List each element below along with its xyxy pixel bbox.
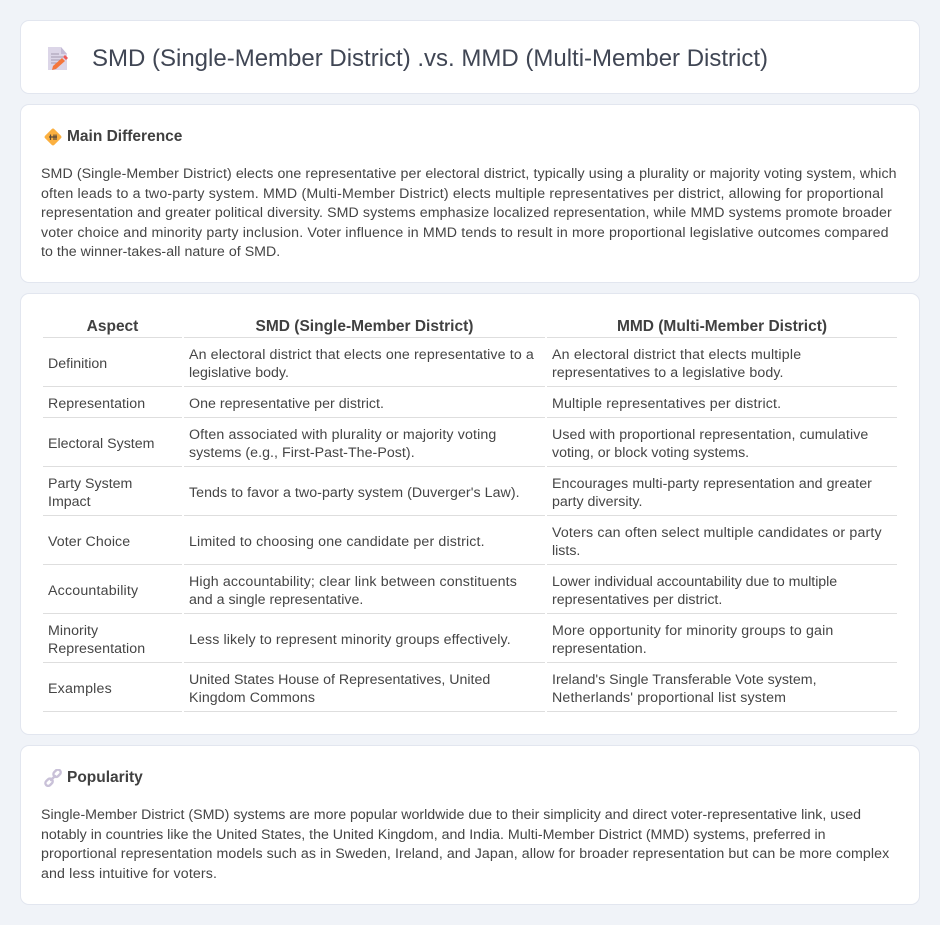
row: representation: One representative per district. [189, 396, 384, 412]
row: accountability [43, 574, 897, 614]
text block: popularity: proportional representation models such as in Sweden, Ireland, and Japan, allow for broader representation but can be more complex [41, 846, 889, 862]
row: electoral system: systems (e.g., First-Past-The-Post). [189, 445, 415, 461]
row: electoral system: Used with proportional representation, cumulative [552, 427, 868, 443]
panel: comparison table [20, 293, 920, 735]
table header: Aspect [87, 318, 138, 335]
row: definition: Definition [48, 356, 107, 372]
row: definition: representatives to a legislative body. [552, 365, 783, 381]
row: party system impact: Party System [48, 476, 132, 492]
table header: SMD (Single-Member District) [256, 318, 473, 335]
panel: popularity [20, 745, 920, 905]
row: voter choice: Limited to choosing one candidate per district. [189, 534, 485, 550]
icon: document with pencil [48, 47, 68, 70]
row: minority representation: More opportunity for minority groups to gain [552, 623, 833, 639]
row: voter choice [43, 525, 897, 565]
row: definition: legislative body. [189, 365, 289, 381]
row: definition: An electoral district that elects multiple [552, 347, 801, 363]
row: minority representation: Representation [48, 641, 145, 657]
text block: popularity: notably in countries like the United States, the United Kingdom, and India. Multi-Member District (MMD) systems, preferred in [41, 826, 826, 842]
panel: main difference [20, 104, 920, 283]
row: minority representation: representation. [552, 641, 647, 657]
row: examples [43, 672, 897, 712]
row: voter choice: lists. [552, 543, 580, 559]
text block: main difference [41, 166, 897, 260]
text block: popularity [41, 807, 889, 882]
row: examples: Kingdom Commons [189, 690, 315, 706]
table header [43, 318, 897, 338]
row: party system impact [43, 476, 897, 516]
row: accountability: representatives per district. [552, 592, 722, 608]
text block: popularity: Single-Member District (SMD) systems are more popular worldwide due to their simplicity and direct voter-representative link, used [41, 807, 861, 823]
heading: main difference: Main Difference [67, 128, 182, 145]
row: accountability: Lower individual accountability due to multiple [552, 574, 837, 590]
row: party system impact: Impact [48, 494, 91, 510]
row: party system impact: Encourages multi-party representation and greater [552, 476, 872, 492]
row: examples: Netherlands' proportional list system [552, 690, 786, 706]
row: examples: Examples [48, 681, 112, 697]
row: definition [43, 347, 897, 387]
text block: main difference: SMD (Single-Member District) elects one representative per electoral district, typically using a plurality or majority voting system, which [41, 166, 897, 182]
row: accountability: Accountability [48, 583, 138, 599]
row: voter choice: Voter Choice [48, 534, 130, 550]
row: electoral system: Electoral System [48, 436, 154, 452]
heading: popularity: Popularity [67, 769, 143, 786]
row: electoral system: voting, or block voting systems. [552, 445, 749, 461]
panel: title card [20, 20, 920, 94]
row: accountability: and a single representative. [189, 592, 363, 608]
row: electoral system [43, 427, 897, 467]
text block: main difference: voter choice and minority party inclusion. Voter influence in MMD tends to result in more proportional legislative outcomes compared [41, 224, 889, 240]
row: representation: Representation [48, 396, 145, 412]
text block: popularity: and less intuitive for voters. [41, 866, 217, 882]
row: party system impact: Tends to favor a two-party system (Duverger's Law). [189, 485, 520, 501]
table header: MMD (Multi-Member District) [617, 318, 827, 335]
row: minority representation: Less likely to represent minority groups effectively. [189, 632, 511, 648]
title: SMD (Single-Member District) .vs. MMD (Multi-Member District) [92, 45, 768, 72]
row: voter choice: Voters can often select multiple candidates or party [552, 525, 882, 541]
row: accountability: High accountability; clear link between constituents [189, 574, 517, 590]
row: party system impact: party diversity. [552, 494, 642, 510]
row: minority representation: Minority [48, 623, 98, 639]
row: minority representation [43, 623, 897, 663]
text block: main difference: often leads to a two-party system. MMD (Multi-Member District) elects multiple representatives per district, allowing for proportional [41, 186, 884, 202]
row: examples: United States House of Representatives, United [189, 672, 490, 688]
text block: main difference: to the winner-takes-all nature of SMD. [41, 244, 280, 260]
row: definition: An electoral district that elects one representative to a [189, 347, 534, 363]
icon: chain link [44, 769, 62, 787]
row: examples: Ireland's Single Transferable Vote system, [552, 672, 817, 688]
icon: orange diamond sign [44, 128, 62, 146]
text block: main difference: representation and greater political diversity. SMD systems emphasize localized representation, while MMD systems promote broader [41, 205, 892, 221]
row: representation [43, 396, 897, 418]
row: representation: Multiple representatives per district. [552, 396, 781, 412]
row: electoral system: Often associated with plurality or majority voting [189, 427, 496, 443]
